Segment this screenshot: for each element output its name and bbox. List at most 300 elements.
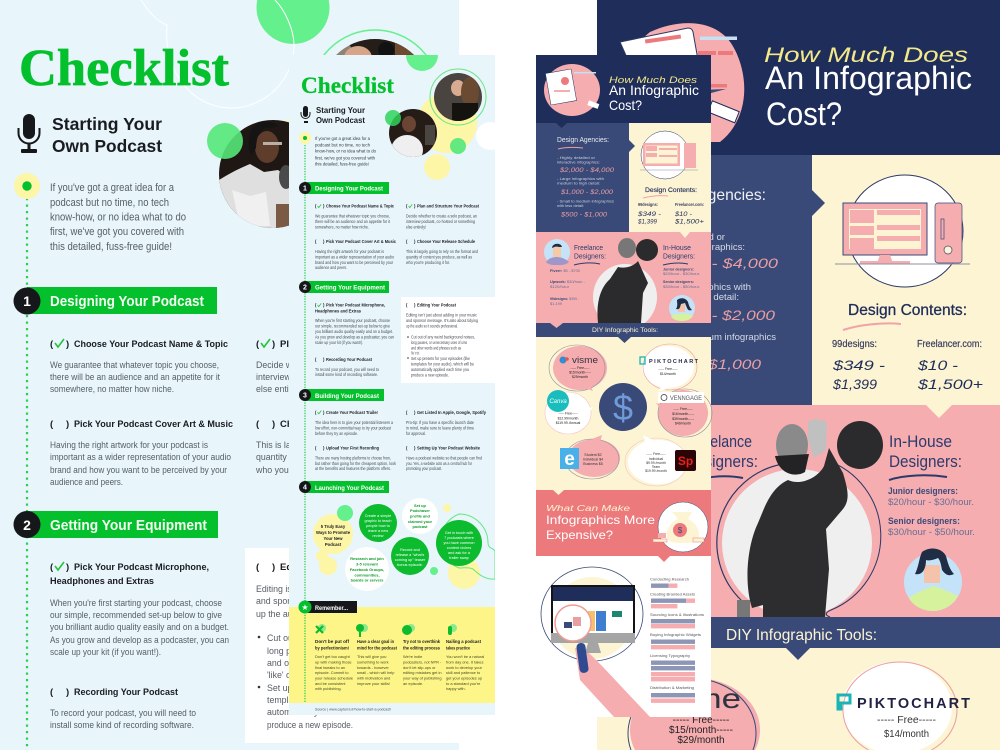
bubble: Canva small: $12.99/month bbox=[558, 416, 578, 420]
heading: Freelance Designers: Designers: bbox=[685, 452, 758, 471]
bubble: Piktochart pricing: $14/month bbox=[884, 729, 929, 740]
panel: Design Agencies small bbox=[536, 123, 629, 232]
band: DIY tools small bbox=[536, 323, 711, 337]
bubble cluster: ways to promote podcast: Facebook Groups, bbox=[350, 567, 384, 572]
intro paragraph small: podcast but no time, no tech bbox=[315, 142, 370, 148]
icon: dollar sign circle bbox=[599, 383, 647, 431]
heading: small section 1: Designing Your Podcast bbox=[315, 186, 384, 192]
section 2 checklist items: you brilliant audio quality easily and on a budget. bbox=[315, 329, 393, 334]
bubble: Adobe Spark small bbox=[625, 435, 696, 486]
title small: Cost? bbox=[609, 97, 642, 113]
bubble: visme pricing: ----- Free----- bbox=[673, 715, 729, 726]
bubble: Piktochart small bbox=[640, 344, 699, 391]
bubble cluster: ways to promote podcast: people how to bbox=[366, 524, 390, 528]
illustration: pink blob with document bbox=[620, 23, 744, 142]
section 3 checklist items: ( bbox=[406, 446, 408, 451]
prices: 99designs and Freelancer: $349 - bbox=[832, 357, 885, 373]
heading: small section 4: Launching Your Podcast bbox=[315, 485, 385, 492]
checklist item: Recording Your Podcast: To record your podcast, you will need to bbox=[50, 708, 196, 718]
section 3 checklist items: promoting your podcast. bbox=[406, 466, 442, 471]
panel: Design Agencies bbox=[597, 155, 812, 405]
section 3 checklist items: but rather than going for the cheapest option, look bbox=[315, 461, 397, 466]
heading: In-House small bbox=[663, 243, 695, 265]
heading: what can make: Expensive? bbox=[546, 528, 613, 542]
header band bbox=[597, 0, 1000, 155]
bubble: visme pricing: $29/month bbox=[677, 735, 725, 746]
checklist item: Plan and Structure (cropped): interview podcast bbox=[256, 372, 325, 382]
heading: In-House small: In-House bbox=[663, 243, 691, 252]
text: remember tips: the editing process bbox=[403, 646, 441, 650]
panel: DIY tools cream background bbox=[597, 648, 1000, 750]
section 2 checklist items: ) bbox=[323, 357, 325, 362]
text: remember tips: towards - however bbox=[357, 665, 389, 670]
bubble cluster: ways to promote podcast: profile and bbox=[410, 514, 431, 518]
section 1 checklist items: ) bbox=[414, 239, 416, 244]
band: DIY tools small: DIY Infographic Tools: bbox=[592, 327, 658, 334]
panel: small podcast checklist infographic bbox=[289, 39, 504, 715]
decoration: top circles and photos bbox=[385, 55, 495, 180]
heading: section 1 Designing Your Podcast: 1 bbox=[23, 293, 31, 309]
text: remember tips: an episode. bbox=[403, 681, 423, 686]
text: remember tips: happy with. bbox=[446, 686, 466, 691]
checklist item: Pick Your Podcast Cover Art and Music: audience and peers. bbox=[50, 477, 123, 487]
card: Editing Your Podcast: automatically bbox=[267, 707, 319, 717]
bubble: visme small: $15/month----- bbox=[569, 370, 591, 374]
checklist item: Pick Your Podcast Microphone: Headphones and Extras bbox=[50, 576, 154, 587]
card: Editing Your Podcast: Set up bbox=[267, 683, 293, 693]
section 1 checklist items: ( bbox=[315, 204, 317, 209]
text: in-house rates small bbox=[663, 266, 700, 289]
band: DIY Infographic Tools bbox=[597, 617, 1000, 660]
bubble cluster: ways to promote podcast: Research and join bbox=[350, 556, 384, 561]
heading: Remember bbox=[298, 600, 357, 614]
panel: DIY tool bubbles bbox=[536, 337, 712, 490]
card: small Editing Your Podcast: 'like' or 'so'. bbox=[411, 351, 420, 356]
heading: section 1 Designing Your Podcast: Designing Your Podcast bbox=[50, 294, 204, 310]
card: small Editing Your Podcast: long pauses, or unnecessary uses of ums bbox=[411, 340, 467, 345]
panel: Design Agencies: $2,000 - $4,000 bbox=[650, 255, 778, 271]
panel: cost drivers bbox=[536, 556, 711, 717]
card: Editing Your Podcast bbox=[245, 548, 459, 743]
bubble: Adobe Spark small: $19.99 /month bbox=[645, 469, 667, 473]
text: in-house rates: Junior designers: bbox=[888, 486, 958, 497]
text: remember tips: You won't be a natural bbox=[446, 654, 484, 659]
section 2 checklist items: install some kind of recording software. bbox=[315, 372, 378, 377]
panel: Remember band bbox=[289, 600, 495, 703]
panel: Design Agencies: medium to high detail: bbox=[645, 292, 739, 303]
bubble cluster: ways to promote podcast: trailer swap bbox=[449, 556, 469, 560]
card: Editing Your Podcast: Cut out bbox=[267, 633, 296, 643]
heading: small section 3: Building Your Podcast bbox=[315, 393, 380, 400]
section 1 checklist items: else entirely! bbox=[406, 224, 426, 230]
card: Editing Your Podcast: ) bbox=[272, 562, 275, 573]
checklist item: Pick Your Podcast Microphone: you brilliant audio quality easily and on a budget. bbox=[50, 622, 229, 632]
text: freelance rates small: $1,199 bbox=[550, 301, 563, 306]
checklist item: Pick Your Podcast Cover Art and Music: ( bbox=[50, 419, 54, 430]
card: small Editing Your Podcast: Editing Your Podcast bbox=[417, 303, 457, 308]
panel: Design Agencies: $500 - $1,000 bbox=[653, 356, 761, 372]
checklist item: Pick Your Podcast Cover Art and Music: important as a wider representation of your audio bbox=[50, 452, 231, 462]
section 3 checklist items: ( bbox=[406, 410, 408, 415]
card: Editing Your Podcast: templates bbox=[267, 695, 306, 705]
subtitle: Starting Your Own Podcast bbox=[52, 114, 162, 156]
bubble: Adobe Spark small: Sp bbox=[678, 454, 693, 468]
subtitle: Starting Your Own Podcast: Own Podcast bbox=[52, 136, 162, 156]
panel: Design Agencies small: interactive infographics: bbox=[557, 160, 600, 164]
bubble cluster: ways to promote podcast: 3-5 relevant bbox=[356, 562, 379, 566]
heading: In-House Designers bbox=[889, 432, 962, 480]
section 3 checklist items: Pro-tip: If you have a specific launch date bbox=[406, 420, 475, 425]
bubble cluster: ways to promote podcast: communities, bbox=[354, 572, 380, 578]
heading: Freelance small: Freelance bbox=[574, 243, 603, 252]
bubble: visme pricing: visme bbox=[650, 683, 741, 714]
bubble: Piktochart pricing bbox=[838, 662, 970, 750]
section 3 checklist items: ) bbox=[414, 446, 416, 451]
heading: Freelance Designers bbox=[685, 432, 758, 479]
section 2 checklist items: ) bbox=[323, 303, 325, 308]
checklist item: Plan and Structure (cropped): ) bbox=[272, 339, 275, 350]
panel: Design Agencies: $1,000 - $2,000 bbox=[653, 307, 775, 323]
card: Editing Your Podcast: Editing bbox=[280, 562, 312, 573]
intro paragraph: podcast but no time, no tech bbox=[50, 197, 169, 209]
bubble: visme pricing: $15/month----- bbox=[669, 725, 733, 736]
illustration: hand with magnifier and computer bbox=[541, 567, 650, 717]
bubble: visme small: ----- Free----- bbox=[570, 366, 590, 370]
chart: cost checklist bars: Creating Branded Assets bbox=[650, 592, 695, 596]
section 2 checklist items: As you grow and develop as a podcaster, you can bbox=[315, 334, 395, 340]
checklist item: Pick Your Podcast Cover Art and Music: Pick Your Podcast Cover Art & Music bbox=[74, 419, 233, 430]
intro paragraph: know-how, or no idea what to do bbox=[50, 212, 186, 224]
subtitle small bbox=[316, 106, 365, 125]
section 3 checklist items: at the benefits and features the platform offers. bbox=[315, 466, 391, 471]
section 1 checklist items: Plan and Structure Your Podcast bbox=[417, 204, 480, 209]
section 1 checklist items: ) bbox=[414, 204, 416, 209]
panel: Design Agencies small: medium to high detail: bbox=[557, 180, 600, 186]
text: remember tips: to a standard you're bbox=[446, 681, 480, 686]
text: remember tips: from day one. It takes bbox=[446, 660, 483, 664]
checklist item: Choose Your Podcast Name and Topic: somewhere, no matter how niche. bbox=[50, 384, 174, 394]
panel: Design Contents small: 99designs: bbox=[638, 202, 658, 207]
section 3 checklist items: ) bbox=[323, 446, 325, 451]
card: small Editing Your Podcast: Set up presets for your episodes (like bbox=[411, 356, 471, 361]
text: in-house rates bbox=[888, 486, 975, 538]
chart: cost checklist bars: Buying Infographic Widgets bbox=[650, 632, 701, 637]
checklist item: Choose Your Podcast Name and Topic: Choose Your Podcast Name & Topic bbox=[74, 339, 228, 350]
section 1 checklist items: ) bbox=[323, 204, 325, 209]
bubble cluster: ways to promote podcast: boards or servers bbox=[351, 578, 383, 582]
card: Editing Your Podcast: and other bbox=[267, 658, 304, 668]
bubble cluster: ways to promote podcast: bonus episode. bbox=[397, 563, 423, 567]
section 3 checklist items: low effort, non-committal way to try your podcast bbox=[315, 426, 392, 430]
checklist item: Pick Your Podcast Microphone bbox=[50, 562, 229, 657]
checklist item: Recording Your Podcast: ( bbox=[50, 687, 54, 698]
header band small bbox=[536, 55, 711, 123]
checklist item: Pick Your Podcast Cover Art and Music: Having the right artwork for your podcast is bbox=[50, 440, 209, 450]
bubble: Canva small: ----- Free----- bbox=[558, 412, 578, 416]
checklist item: Choose Your Podcast Name and Topic: there will be an audience and an appetite for it bbox=[50, 372, 221, 382]
photo: man holding cap bbox=[717, 419, 883, 617]
section 2 checklist items: Pick Your Podcast Microphone, bbox=[326, 303, 385, 308]
bubble: Venngage small bbox=[656, 389, 712, 437]
title small bbox=[609, 75, 699, 113]
section 1 checklist items: ( bbox=[406, 204, 408, 209]
text: freelance rates small: Fiverr: $5 - $700 bbox=[550, 268, 581, 273]
heading: small section 4 bbox=[299, 481, 389, 493]
section 3 checklist items bbox=[315, 410, 487, 471]
section 1 checklist items: Pick Your Podcast Cover Art & Music bbox=[326, 239, 397, 244]
text: remember tips: your release schedule bbox=[315, 676, 353, 680]
panel: large podcast checklist (background copy) bbox=[0, 0, 459, 750]
checklist item: Choose Release Schedule (cropped) bbox=[255, 419, 339, 475]
checklist item: Choose Your Podcast Name and Topic: We guarantee that whatever topic you choose, bbox=[50, 360, 219, 370]
panel: Design Contents bbox=[812, 155, 1000, 405]
text: remember tips: Try not to overthink bbox=[403, 639, 441, 644]
section 1 checklist items: Having the right artwork for your podcast is bbox=[315, 249, 384, 254]
section 1 checklist items: ) bbox=[323, 239, 325, 244]
title: How Much Does An Infographic Cost?: Cost? bbox=[766, 96, 842, 132]
prices: 99designs and Freelancer: $1,399 bbox=[832, 376, 877, 392]
heading: small section 4: 4 bbox=[303, 484, 307, 492]
photo: woman podcaster cropped at top bbox=[323, 29, 427, 55]
section 3 checklist items: Have a podcast website so that people can find bbox=[406, 456, 483, 460]
card: Editing Your Podcast: 'like' or bbox=[267, 670, 294, 680]
bubble cluster: ways to promote podcast: 5 Truly Easy bbox=[321, 524, 346, 529]
heading: Freelance Designers: Freelance bbox=[689, 432, 752, 451]
section 3 checklist items: ) bbox=[414, 410, 416, 415]
text: remember tips: editing mistakes get in bbox=[403, 670, 442, 675]
checklist item: Pick Your Podcast Microphone: our simple, recommended set-up below to give bbox=[50, 610, 222, 620]
heading: Freelance small: Designers: bbox=[574, 252, 606, 260]
bubble cluster: ways to promote podcast: review bbox=[373, 534, 384, 538]
panel: Design Agencies small: Design Agencies: bbox=[557, 137, 609, 144]
bubble cluster: ways to promote podcast: Ways to Promote bbox=[316, 530, 351, 535]
title small: How Much Does bbox=[609, 75, 698, 85]
panel: Design Agencies small: $500 - $1,000 bbox=[560, 212, 608, 218]
text: remember tips: something to work bbox=[357, 660, 389, 664]
text: remember tips: with publishing. bbox=[315, 686, 342, 691]
intro paragraph small: this detailed, fuss-free guide! bbox=[315, 162, 369, 168]
heading: section 2 Getting Your Equipment: Getting Your Equipment bbox=[50, 518, 207, 534]
checklist item: Recording Your Podcast bbox=[50, 687, 196, 730]
decoration: green circle and outline bbox=[141, 0, 330, 108]
photo: smiling man podcaster with headphones bbox=[207, 120, 289, 228]
section 1 checklist items: Decide whether to create a solo podcast, an bbox=[406, 214, 478, 218]
bubble cluster: ways to promote podcast: graphic to teach bbox=[364, 519, 392, 523]
bubble: Piktochart pricing: ----- Free----- bbox=[877, 715, 936, 726]
bubble: Piktochart small: PIKTOCHART bbox=[649, 359, 699, 365]
card: small Editing Your Podcast: automatically applied each time you bbox=[411, 367, 470, 372]
bubble: visme small: visme bbox=[572, 355, 598, 365]
icon: money bag bbox=[653, 502, 708, 552]
card: Editing Your Podcast: up the audio bbox=[256, 609, 305, 619]
text: freelance rates small: 99designs: $399 - bbox=[550, 296, 580, 301]
section 3 checklist items: ( bbox=[315, 446, 317, 451]
prices: 99designs and Freelancer: $10 - bbox=[917, 357, 958, 373]
heading: Remember: Remember... bbox=[315, 605, 348, 612]
panel: Design Agencies small: - Large infographics with bbox=[557, 176, 604, 181]
heading: small section 3: 3 bbox=[303, 392, 307, 400]
checklist item: Plan and Structure (cropped): Plan bbox=[280, 339, 300, 350]
title: How Much Does An Infographic Cost? bbox=[764, 44, 972, 132]
icon: money bag: $ bbox=[678, 526, 683, 535]
bubble: Piktochart small: ----- Free----- bbox=[658, 367, 678, 371]
panel: designers pink band bbox=[597, 405, 1000, 617]
text: in-house rates small: $30/hour - $50/hour. bbox=[663, 284, 700, 289]
panel: designers pink band small bbox=[536, 232, 711, 330]
section 2 checklist items: Headphones and Extras bbox=[315, 308, 362, 314]
icon: woman avatar small bbox=[669, 295, 695, 321]
bubble: Easel.ly small: Business $5 bbox=[583, 462, 603, 466]
panel: Design Contents small: Design Contents: bbox=[645, 187, 697, 194]
icon: start dot small bbox=[299, 132, 311, 144]
text: freelance rates small bbox=[550, 268, 586, 306]
bubble cluster: ways to promote podcast: release a "what's bbox=[396, 553, 424, 557]
chart: cost checklist bars: Distribution & Marketing bbox=[650, 685, 694, 690]
heading: small section 2 bbox=[299, 281, 389, 293]
bubble: Easel.ly small: Student $2 bbox=[584, 453, 602, 457]
heading: what can make bbox=[546, 504, 655, 542]
heading: small section 1 bbox=[299, 182, 389, 194]
heading: In-House Designers: In-House bbox=[889, 432, 952, 451]
checklist item: Choose Your Podcast Name and Topic: ) bbox=[66, 339, 69, 350]
section 2 checklist items: our simple, recommended set-up below to give bbox=[315, 324, 391, 328]
text: remember tips: podcasters, not NPR - bbox=[403, 660, 442, 664]
photo: man small bbox=[593, 238, 658, 330]
card: Editing Your Podcast: long pauses bbox=[267, 646, 315, 656]
timeline: dotted green line bbox=[26, 198, 28, 750]
text: freelance rates small: $120/hour bbox=[550, 284, 570, 289]
card: small Editing Your Podcast: ( bbox=[406, 303, 408, 308]
section 1 checklist items: Choose Your Release Schedule bbox=[417, 239, 476, 244]
bubble: Canva small: $119.99 /Annual bbox=[556, 421, 580, 425]
bubble: Adobe Spark small: $9.99 /month bbox=[646, 461, 666, 465]
chart: cost checklist bars bbox=[650, 576, 704, 703]
card: Editing Your Podcast: produce a new episode. bbox=[267, 720, 353, 730]
section 1 checklist items bbox=[315, 204, 480, 270]
bubble cluster: ways to promote podcast: coming up" teaser bbox=[395, 558, 426, 562]
card: small Editing Your Podcast: Editing isn't just about adding in your music bbox=[406, 312, 477, 318]
section 1 checklist items: This is largely going to rely on the format and bbox=[406, 249, 479, 254]
icon: woman avatar bbox=[904, 549, 962, 611]
checklist item: Pick Your Podcast Cover Art and Music bbox=[50, 419, 233, 487]
heading: Design Contents: Design Contents: bbox=[848, 302, 967, 319]
panel: Design Agencies small: $2,000 - $4,000 bbox=[559, 168, 615, 174]
text: remember tips: Don't get too caught bbox=[315, 654, 351, 659]
section 1 checklist items: audience and peers. bbox=[315, 265, 347, 270]
checklist item: Pick Your Podcast Microphone: Pick Your Podcast Microphone, bbox=[74, 562, 209, 573]
text: remember tips: This will give you bbox=[357, 654, 386, 659]
section 2 checklist items: To record your podcast, you will need to bbox=[315, 367, 380, 372]
prices: 99designs and Freelancer: $1,500+ bbox=[917, 376, 983, 392]
intro paragraph small bbox=[315, 136, 376, 168]
subtitle: Starting Your Own Podcast: Starting Your bbox=[52, 114, 162, 134]
text: remember tips: Nailing a podcast bbox=[446, 639, 482, 644]
heading: Remember: ★ bbox=[301, 603, 309, 612]
icons: remember tips bbox=[316, 624, 457, 637]
text: remember tips: up with making those bbox=[315, 660, 352, 664]
card: Editing Your Podcast: Editing isn't bbox=[256, 584, 301, 594]
section 2 checklist items: Recording Your Podcast bbox=[326, 357, 373, 362]
panel: Design Contents small: $349 - bbox=[637, 212, 661, 218]
bubble: Canva small: Canva bbox=[549, 399, 567, 405]
panel: Design Contents small: $10 - bbox=[674, 212, 692, 218]
chart: cost checklist bars: Conducting Research bbox=[650, 576, 689, 582]
text: in-house rates small: $20/hour - $30/hour. bbox=[663, 271, 700, 276]
panel: Design Agencies small: - Highly detailed or bbox=[557, 155, 596, 160]
checklist item: Choose Your Podcast Name and Topic: ( bbox=[50, 339, 54, 350]
section 3 checklist items: before they try an episode. bbox=[315, 431, 358, 436]
section 1 checklist items: brand and how you want to be perceived by your bbox=[315, 260, 394, 265]
heading: Freelance small bbox=[574, 243, 606, 265]
heading: small section 2: Getting Your Equipment bbox=[315, 284, 386, 292]
text: remember tips: improve your skills! bbox=[357, 681, 390, 686]
heading: section 1 Designing Your Podcast bbox=[14, 287, 217, 314]
bubble: Venngage small: $49/month bbox=[675, 422, 691, 426]
bubble cluster: ways to promote podcast: Podcast bbox=[325, 542, 342, 547]
bubble: Easel.ly small bbox=[560, 435, 620, 479]
bubble cluster: ways to promote podcast: content niches bbox=[447, 546, 471, 550]
checklist item: Choose Release Schedule (cropped): Choose bbox=[280, 419, 315, 430]
title: How Much Does An Infographic Cost?: How Much Does bbox=[764, 44, 969, 67]
checklist item: Recording Your Podcast: ) bbox=[66, 687, 69, 698]
bubble cluster: ways to promote podcast: Create a simple bbox=[365, 514, 391, 518]
heading: In-House small: Designers: bbox=[663, 252, 695, 260]
text: remember tips bbox=[315, 639, 484, 691]
text: remember tips: Have a clear goal in bbox=[357, 639, 394, 644]
bubble: Adobe Spark small: Individual bbox=[649, 457, 663, 461]
text: in-house rates: $30/hour - $50/hour. bbox=[888, 527, 975, 538]
intro paragraph: first, we've got you covered with bbox=[50, 226, 184, 238]
heading: small section 1: 1 bbox=[303, 186, 307, 192]
chart: cost checklist bars: Sourcing Icons & Illustrations bbox=[650, 612, 704, 617]
band: DIY Infographic Tools: DIY Infographic Tools: bbox=[726, 627, 877, 644]
bubble cluster: ways to promote podcast: Your New bbox=[323, 536, 343, 541]
checklist item: Pick Your Podcast Microphone: ) bbox=[66, 562, 69, 573]
icon: freelance man avatar bbox=[544, 239, 570, 265]
panel: Design Agencies: - Large infographics with bbox=[645, 282, 751, 293]
section 1 checklist items: who you're producing it for. bbox=[406, 260, 450, 265]
section 3 checklist items: you. Yes, a website acts as a central hub for bbox=[406, 461, 472, 466]
intro paragraph small: first, we've got you covered with bbox=[315, 155, 375, 161]
bubble: visme small bbox=[549, 345, 607, 391]
bubble cluster: ways to promote podcast: and ask for a bbox=[448, 551, 471, 555]
section 3 checklist items: The idea here is to give your potential listeners a bbox=[315, 420, 394, 425]
bubble: visme small: $29/month bbox=[572, 375, 588, 379]
panel: What can make infographics more expensive bbox=[536, 490, 711, 556]
bubble cluster: ways to promote podcast: podcast bbox=[413, 524, 428, 529]
text: remember tips: Don't be put off bbox=[315, 639, 350, 644]
checklist item: Choose Release Schedule (cropped): who you're producing bbox=[255, 465, 339, 475]
text: remember tips: work to develop your bbox=[446, 665, 483, 670]
section 3 checklist items: There are many hosting platforms to choose from, bbox=[315, 456, 391, 460]
text: freelance rates small: Upwork: $30/hour - bbox=[550, 279, 586, 284]
bubble: Venngage small: $39/month----- bbox=[672, 417, 694, 421]
text: remember tips: episode. Commit to bbox=[315, 670, 349, 675]
panel: Design Contents small: $1,399 bbox=[637, 220, 658, 226]
heading: small section 2: 2 bbox=[303, 284, 307, 292]
icon: dollar sign circle: $ bbox=[613, 387, 633, 428]
checklist item: Pick Your Podcast Microphone: ( bbox=[50, 562, 54, 573]
section 1 checklist items: interview podcast, co-hosted or something bbox=[406, 219, 476, 224]
text: in-house rates: Senior designers: bbox=[888, 516, 960, 527]
checklist item: Recording Your Podcast: install some kind of recording software. bbox=[50, 720, 194, 730]
title: How Much Does An Infographic Cost?: An Infographic bbox=[765, 60, 972, 96]
checklist item: Pick Your Podcast Cover Art and Music: brand and how you want to be perceived by your bbox=[50, 465, 227, 475]
section 3 checklist items: Upload Your First Recording bbox=[326, 446, 379, 451]
checklist item: Pick Your Podcast Microphone: When you're first starting your podcast, choose bbox=[50, 598, 222, 608]
bubble cluster: ways to promote podcast: claimed your bbox=[408, 519, 432, 524]
section 2 checklist items: ( bbox=[315, 357, 317, 362]
